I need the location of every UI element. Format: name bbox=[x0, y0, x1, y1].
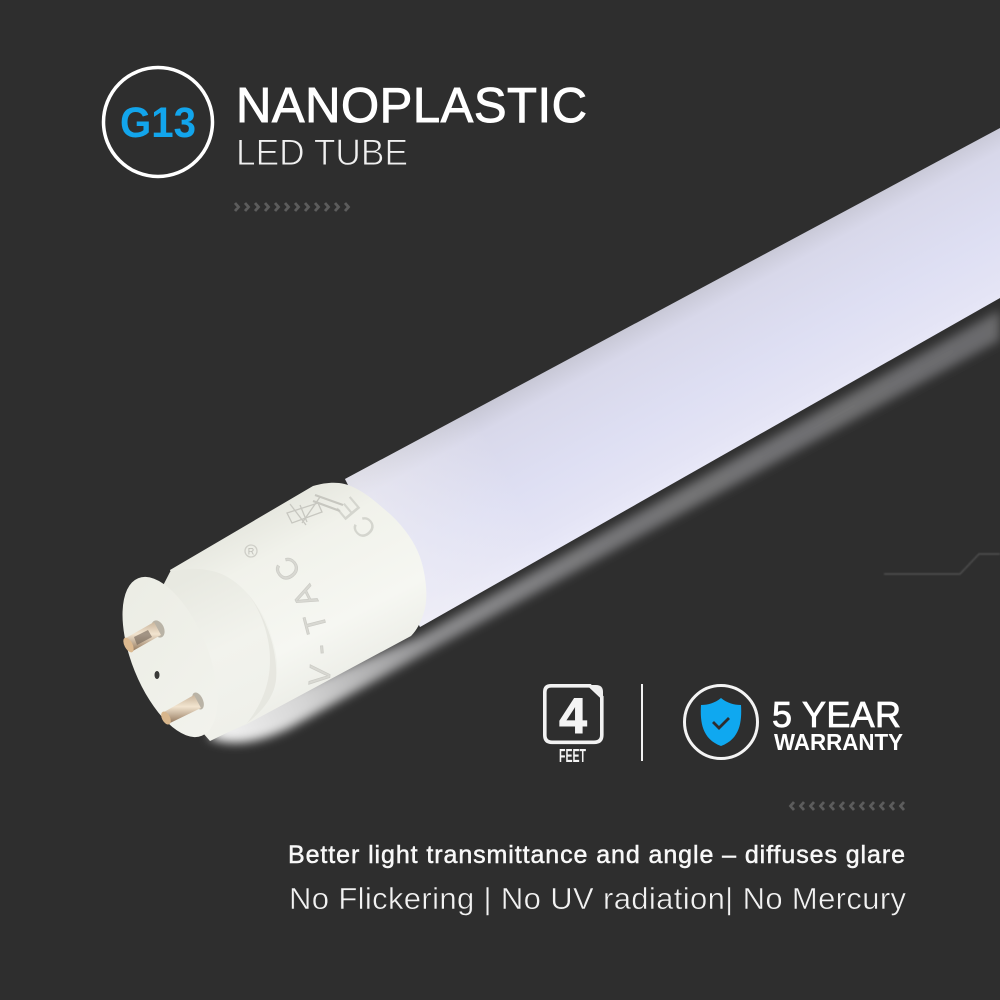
embossed disposal symbol bbox=[287, 495, 343, 525]
pin bottom bbox=[159, 691, 206, 726]
tube reflection glow bbox=[208, 310, 1000, 743]
icon: 4 feet: 4 bbox=[559, 688, 587, 744]
warranty text: 5 YEAR bbox=[772, 694, 901, 735]
divider bbox=[641, 684, 643, 761]
subtitle: LED TUBE bbox=[236, 131, 408, 173]
LED tube bbox=[122, 128, 1000, 741]
icon: warranty shield bbox=[684, 686, 758, 758]
registered mark: R bbox=[248, 546, 255, 556]
registered mark bbox=[245, 545, 257, 557]
pin top bbox=[121, 618, 167, 654]
warranty text bbox=[772, 694, 903, 755]
title: NANOPLASTIC bbox=[236, 79, 587, 133]
feature headline: Better light transmittance and angle – diffuses glare bbox=[288, 841, 905, 869]
end cap face bbox=[103, 564, 237, 750]
center hole bbox=[154, 671, 160, 679]
decorative circuit line bbox=[884, 554, 1000, 574]
warranty text: WARRANTY bbox=[774, 729, 903, 755]
feature list: No Flickering | No UV radiation| No Mercury bbox=[289, 881, 906, 916]
embossed V-TAC logo: V-TAC bbox=[276, 558, 330, 685]
end cap neck bbox=[130, 569, 277, 741]
embossed CE mark: CE bbox=[331, 491, 383, 545]
badge: G13 bbox=[104, 68, 212, 176]
icon: 4 feet: FEET bbox=[559, 746, 586, 766]
chevrons right bbox=[235, 203, 348, 211]
chevrons left bbox=[790, 802, 904, 810]
tube body bbox=[345, 128, 1000, 627]
badge: G13: G13 bbox=[120, 99, 196, 147]
icon: 4 feet bbox=[545, 685, 603, 766]
end cap collar bbox=[170, 483, 426, 740]
